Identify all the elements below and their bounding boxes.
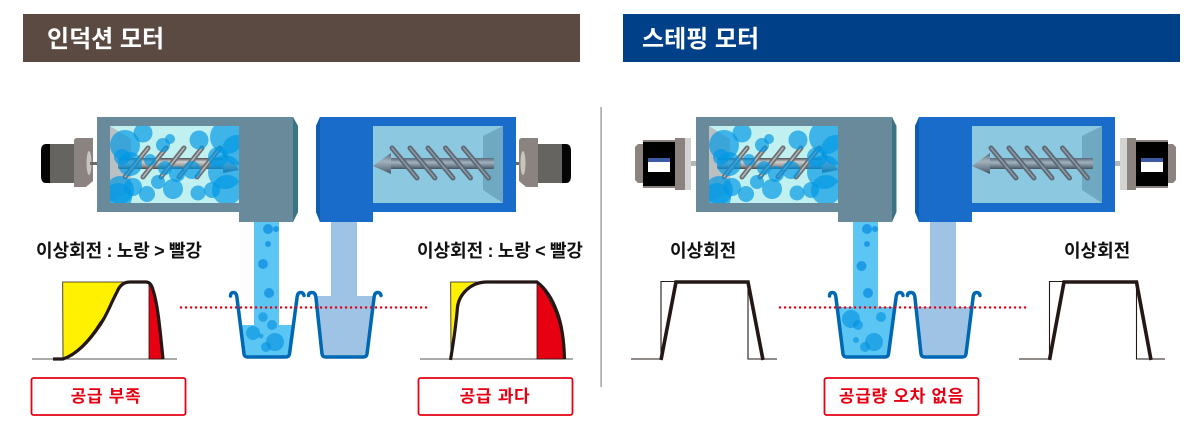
banner title: stepping motor: 스테핑 모터 <box>642 26 759 53</box>
banner title: induction motor: 인덕션 모터 <box>47 26 164 53</box>
chart: under-supply trapezoid curve <box>32 282 177 360</box>
stream: induction under-supply powder <box>254 222 279 326</box>
label: induction rotation left: 이상회전 : 노랑 > 빨강 <box>36 241 202 261</box>
hopper: induction left, full with blobs <box>97 117 298 222</box>
callout: no supply error <box>824 378 978 415</box>
screw: stepping right <box>972 148 1093 178</box>
reference line: stepping target level <box>780 306 1030 309</box>
stream: induction over-supply powder <box>331 222 357 297</box>
bucket: induction under-supply <box>230 292 304 357</box>
bucket: induction over-supply <box>308 292 381 357</box>
callout: supply shortage <box>32 378 186 415</box>
motor: stepping motor left <box>635 138 696 190</box>
callout: no supply error: 공급량 오차 없음 <box>839 387 964 406</box>
bucket: stepping right <box>908 292 980 357</box>
hopper: induction right <box>316 117 516 222</box>
powder blobs: stepping left <box>709 126 838 203</box>
motor name plate <box>1141 158 1163 172</box>
hopper: stepping left, with blobs <box>696 117 896 222</box>
banner: induction motor <box>23 14 580 62</box>
callout: over supply <box>418 378 572 415</box>
motor: induction motor left <box>41 138 97 187</box>
label: stepping rotation right: 이상회전 <box>1064 241 1130 261</box>
screw: induction right <box>373 148 494 178</box>
chart: stepping right trapezoid <box>1019 282 1165 360</box>
motor name plate <box>648 158 670 172</box>
divider between motor types <box>600 107 602 387</box>
stream: stepping left powder <box>853 222 878 308</box>
motor: induction motor right <box>516 138 571 187</box>
screw: stepping left <box>717 148 838 177</box>
label: stepping rotation left: 이상회전 <box>670 241 736 261</box>
banner: stepping motor <box>623 14 1180 62</box>
bucket: stepping left <box>830 292 903 357</box>
chart: stepping left trapezoid <box>631 282 777 360</box>
screw: induction left <box>118 148 239 177</box>
callout: supply shortage: 공급 부족 <box>71 387 141 406</box>
powder blobs: induction left <box>110 126 239 203</box>
callout: over supply: 공급 과다 <box>460 387 530 406</box>
stream: stepping right powder <box>930 222 956 308</box>
hopper: stepping right <box>915 117 1115 222</box>
chart: over-supply trapezoid curve <box>420 282 573 360</box>
reference line: induction target level <box>181 306 431 309</box>
motor: stepping motor right <box>1115 138 1176 190</box>
label: induction rotation right: 이상회전 : 노랑 < 빨강 <box>417 241 583 261</box>
